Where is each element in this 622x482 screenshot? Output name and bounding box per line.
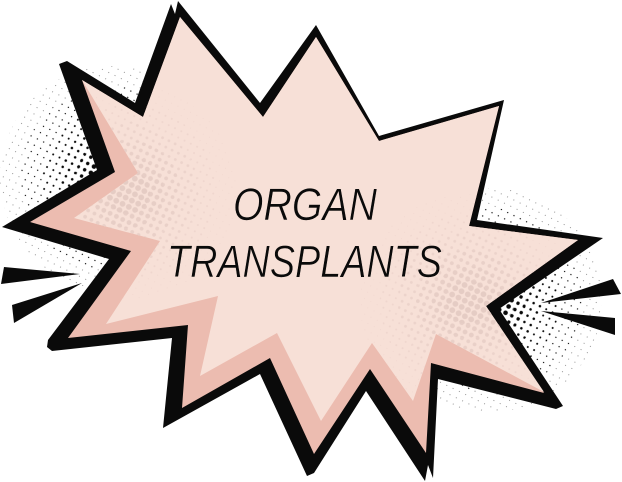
halftone: pink dots on burst face	[79, 94, 546, 374]
icon: left burst lines	[1, 267, 82, 323]
title: ORGAN	[233, 179, 377, 230]
title	[167, 179, 442, 287]
title: TRANSPLANTS	[167, 236, 442, 287]
burst: salmon shadow layer	[30, 17, 578, 454]
halftone: black dots behind left of burst	[0, 66, 224, 290]
halftone: black dots behind right of burst	[378, 188, 602, 412]
icon: right burst lines	[541, 279, 621, 335]
burst: pale pink face	[74, 17, 578, 421]
